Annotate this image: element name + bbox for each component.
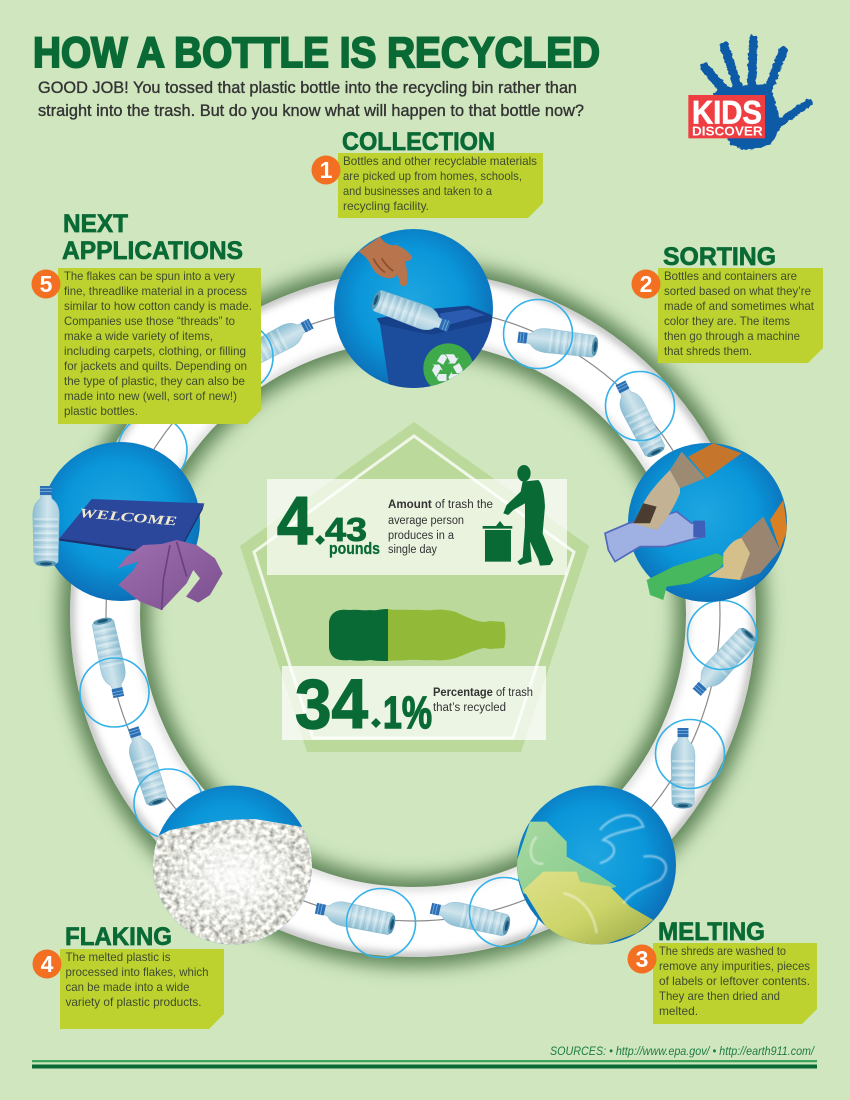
stat panel: percent recycled: 34 [295, 665, 368, 743]
panel: melting: 3 [636, 946, 648, 972]
heading: flaking: FLAKING [65, 923, 172, 951]
icon: person throwing trash in a bin [483, 465, 553, 566]
stat panel: percent recycled: 1% [383, 687, 432, 738]
panel: melting: They are then dried and [659, 989, 780, 1003]
panel: collection: are picked up from homes, schools, [343, 169, 522, 183]
panel: sorting: color they are. The items [664, 314, 790, 328]
intro text: straight into the trash. But do you know what will happen to that bottle now? [38, 102, 584, 120]
panel: next applications: plastic bottles. [64, 404, 138, 418]
panel: next applications [32, 210, 261, 424]
bottles along the ring [80, 300, 759, 958]
panel: collection: recycling facility. [343, 199, 429, 213]
heading: next applications: NEXT [63, 210, 128, 238]
panel: flaking: variety of plastic products. [66, 995, 202, 1009]
panel: next applications: the type of plastic, they can also be [64, 374, 245, 388]
panel: melting [628, 918, 817, 1024]
panel: next applications: similar to how cotton candy is made. [64, 299, 252, 313]
logo: Kids Discover [688, 39, 809, 151]
sphere 1: collection: ♻ [429, 344, 466, 393]
panel: melting: The shreds are washed to [659, 944, 786, 958]
sphere 2: sorting [605, 443, 787, 602]
panel: flaking: can be made into a wide [66, 980, 190, 994]
panel: sorting: 2 [640, 271, 652, 297]
heading: collection: COLLECTION [342, 128, 495, 156]
panel: flaking: processed into flakes, which [66, 965, 208, 979]
panel: sorting [632, 243, 823, 363]
footer rules [32, 1060, 817, 1068]
panel: flaking: The melted plastic is [66, 950, 171, 964]
heading: next applications: APPLICATIONS [62, 237, 243, 265]
panel: collection: Bottles and other recyclable materials [343, 154, 537, 168]
intro text [38, 79, 584, 120]
panel: sorting: Bottles and containers are [664, 269, 797, 283]
panel: next applications: fine, threadlike material in a process [64, 284, 247, 298]
panel: sorting: then go through a machine [664, 329, 800, 343]
stat panel: trash per day: 43 [325, 511, 367, 548]
panel: melting: melted. [659, 1004, 698, 1018]
panel: melting: remove any impurities, pieces [659, 959, 810, 973]
panel: next applications: made into new (well, sort of new!) [64, 389, 237, 403]
logo: Kids Discover: DISCOVER [692, 124, 763, 138]
center statistics pentagon [240, 422, 589, 752]
panel: flaking [32, 923, 224, 1029]
recycling loop ring [70, 271, 756, 957]
panel: next applications: The flakes can be spun into a very [64, 269, 235, 283]
sphere 5: next applications: WELCOME [79, 505, 178, 529]
sphere 3: melting [515, 786, 676, 945]
stat panel: percent recycled [282, 665, 546, 743]
stat panel: trash per day: pounds [329, 539, 380, 558]
sources: SOURCES: • http://www.epa.gov/ • http://earth911.com/ [550, 1046, 816, 1058]
panel: sorting: sorted based on what they’re [664, 284, 811, 298]
logo: Kids Discover: KIDS [692, 94, 762, 131]
bottle fill chart: 34.1 percent recycled [329, 609, 506, 661]
stat panel: percent recycled: Percentage of trash [433, 687, 533, 699]
heading: next applications [62, 210, 243, 265]
panel: next applications: 5 [40, 271, 53, 297]
stat panel: trash per day: 4 [277, 483, 313, 559]
sphere 4: flaking [150, 786, 320, 950]
panel: next applications: for jackets and quilts. Depending on [64, 359, 247, 373]
panel: next applications: make a wide variety of items, [64, 329, 213, 343]
panel: collection: 1 [320, 157, 333, 183]
panel: sorting: made of and sometimes what [664, 299, 815, 313]
panel: sorting: that shreds them. [664, 344, 752, 358]
sphere 1: collection [334, 229, 493, 393]
sphere 5: next applications [33, 442, 223, 610]
intro text: GOOD JOB! You tossed that plastic bottle into the recycling bin rather than [38, 79, 577, 97]
stat panel: trash per day: produces in a [388, 530, 455, 542]
panel: next applications: Companies use those “threads” to [64, 314, 235, 328]
stat panel: percent recycled: that’s recycled [433, 702, 506, 714]
heading: melting: MELTING [658, 918, 765, 946]
panel: flaking: 4 [41, 951, 54, 977]
title: HOW A BOTTLE IS RECYCLED [33, 29, 600, 77]
stat panel: trash per day: single day [388, 544, 437, 556]
stat panel: trash per day: Amount of trash the [388, 499, 493, 511]
heading: sorting: SORTING [663, 243, 776, 271]
panel: next applications: including carpets, clothing, or filling [64, 344, 246, 358]
panel: collection: and businesses and taken to a [343, 184, 492, 198]
stat panel: trash per day [267, 479, 567, 575]
stat panel: trash per day: average person [388, 515, 464, 527]
panel: melting: of labels or leftover contents. [659, 974, 810, 988]
panel: collection [312, 128, 543, 218]
